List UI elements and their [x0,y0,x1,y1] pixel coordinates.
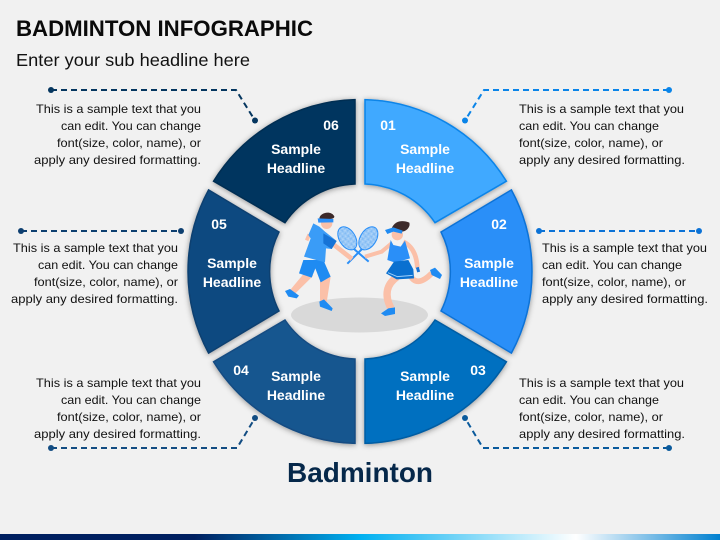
sub headline: Enter your sub headline here [16,50,250,70]
panel: segment 03: Sample [400,368,450,384]
panel: segment 04: Headline [267,387,325,403]
text block 04: This is a sample text that you [36,376,201,390]
text block 05 [11,241,178,306]
text block 03 [519,376,685,441]
connector 01 [462,87,672,124]
text block 05: This is a sample text that you [13,241,178,255]
text block 05: can edit. You can change [38,258,178,272]
caption: Badminton [287,457,433,488]
text block 04 [34,376,201,441]
panel: segment 05: Headline [203,274,261,290]
text block 01: apply any desired formatting. [519,153,685,167]
footer gradient bar [0,534,720,540]
panel: segment 06: Headline [267,160,325,176]
text block 01: This is a sample text that you [519,102,684,116]
text block 06: This is a sample text that you [36,102,201,116]
text block 02: This is a sample text that you [542,241,707,255]
text block 06: can edit. You can change [61,119,201,133]
text block 04: can edit. You can change [61,393,201,407]
text block 06 [34,102,201,167]
text block 02: font(size, color, name), or [542,275,686,289]
connector 03 [462,415,672,451]
connector 05 [18,228,184,234]
panel: segment 02: 02 [491,216,507,232]
panel: segment 04 [214,320,355,443]
illustration: badminton players [285,213,442,332]
text block 02 [542,241,708,306]
connector 04 [48,415,258,451]
panel: segment 04: Sample [271,368,321,384]
panel: segment 03: 03 [470,362,486,378]
panel: segment 03: Headline [396,387,454,403]
text block 03: can edit. You can change [519,393,659,407]
panel: segment 05 [188,190,279,353]
panel: segment 01 [365,100,506,223]
text block 06: apply any desired formatting. [34,153,201,167]
connector 06 [48,87,258,124]
text block 04: apply any desired formatting. [34,427,201,441]
panel: segment 01: Sample [400,141,450,157]
panel: segment 05: Sample [207,255,257,271]
panel: segment 02: Sample [464,255,514,271]
text block 03: apply any desired formatting. [519,427,685,441]
panel: segment 01: 01 [380,117,396,133]
panel: segment 06 [214,100,355,223]
text block 02: can edit. You can change [542,258,682,272]
panel: segment 05: 05 [211,216,227,232]
connector 02 [536,228,702,234]
panel: segment 06: Sample [271,141,321,157]
text block 04: font(size, color, name), or [57,410,201,424]
panel: segment 02 [441,190,532,353]
text block 03: This is a sample text that you [519,376,684,390]
text block 03: font(size, color, name), or [519,410,663,424]
text block 01: can edit. You can change [519,119,659,133]
panel: segment 03 [365,320,506,443]
panel: segment 06: 06 [323,117,339,133]
title: BADMINTON INFOGRAPHIC [16,16,313,41]
text block 05: apply any desired formatting. [11,292,178,306]
text block 02: apply any desired formatting. [542,292,708,306]
text block 01: font(size, color, name), or [519,136,663,150]
text block 06: font(size, color, name), or [57,136,201,150]
text block 05: font(size, color, name), or [34,275,178,289]
panel: segment 02: Headline [460,274,518,290]
text block 01 [519,102,685,167]
panel: segment 04: 04 [233,362,249,378]
panel: segment 01: Headline [396,160,454,176]
